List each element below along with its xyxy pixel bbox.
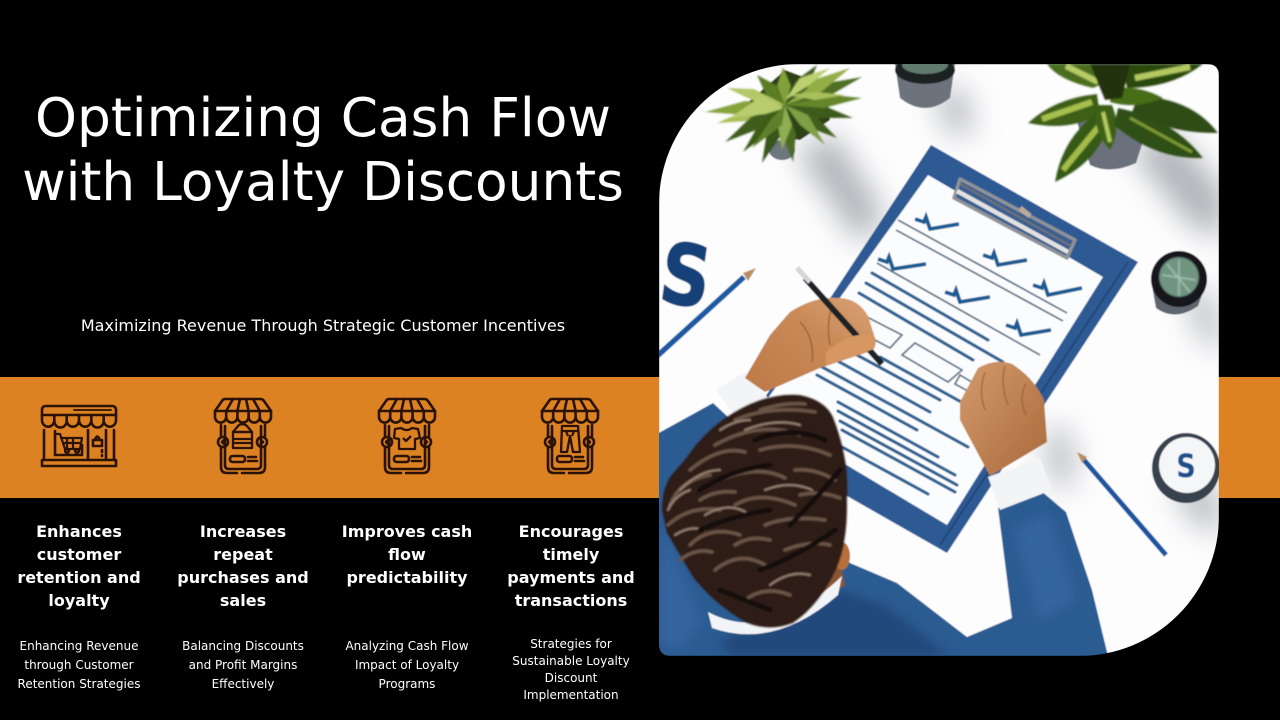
businessman: writing hand and pen	[745, 268, 882, 392]
column: cash flow predictability: Analyzing Cash Flow	[345, 638, 469, 652]
column: retention: through Customer	[24, 658, 134, 672]
title	[22, 86, 624, 213]
right plant	[1028, 64, 1218, 182]
column: repeat purchases: Increases	[200, 522, 286, 541]
coin with S	[1152, 433, 1220, 503]
column: repeat purchases: sales	[220, 591, 266, 610]
icon: storefront with cart	[42, 406, 116, 466]
column: repeat purchases: Effectively	[212, 676, 274, 690]
subtitle: Maximizing Revenue Through Strategic Customer Incentives	[81, 316, 565, 335]
soft shadows	[795, 85, 1225, 530]
check marks	[878, 217, 1082, 335]
photo panel: businessman reviewing a clipboard	[659, 64, 1219, 656]
title: with Loyalty Discounts	[22, 150, 624, 213]
pencil: left	[655, 268, 756, 358]
column: timely payments: timely	[543, 545, 599, 564]
big dollar-style S: S	[654, 225, 717, 328]
businessman: resting hand	[960, 362, 1047, 476]
column: timely payments: Strategies for	[530, 637, 612, 651]
column: retention	[17, 522, 141, 690]
column: timely payments	[507, 522, 635, 702]
left plant	[705, 65, 862, 163]
column: retention: Retention Strategies	[18, 676, 140, 690]
icon: mobile shop with shirt	[379, 399, 435, 473]
column: timely payments: Discount	[545, 671, 597, 685]
column: repeat purchases: repeat	[213, 545, 273, 564]
column: timely payments: transactions	[515, 591, 627, 610]
businessman: neck, collar, ear	[708, 542, 850, 634]
column: cash flow predictability: flow	[388, 545, 426, 564]
businessman: suit	[655, 403, 1108, 656]
cactus pot	[1151, 251, 1207, 315]
coin with S: S	[1176, 448, 1196, 486]
businessman: shirt cuffs	[716, 372, 1052, 510]
column: cash flow predictability: Programs	[379, 676, 435, 690]
pencil: right	[1077, 452, 1166, 555]
icon: mobile shop with bag	[215, 399, 271, 473]
orange band	[0, 377, 1280, 498]
column: timely payments: Encourages	[519, 522, 623, 541]
column: retention: Enhances	[36, 522, 122, 541]
column: cash flow predictability: predictability	[346, 568, 468, 587]
column: timely payments: Implementation	[523, 688, 619, 702]
clipboard	[740, 145, 1138, 553]
column: retention: retention and	[17, 568, 141, 587]
column: timely payments: payments and	[507, 568, 635, 587]
top pot	[894, 64, 956, 108]
column: retention: customer	[37, 545, 121, 564]
column: repeat purchases	[177, 522, 309, 690]
businessman: hair	[662, 395, 847, 628]
column: retention: loyalty	[48, 591, 110, 610]
column: repeat purchases: Balancing Discounts	[182, 638, 304, 652]
metal clip	[954, 179, 1075, 258]
form lines	[862, 220, 1067, 391]
column: retention: Enhancing Revenue	[20, 638, 138, 652]
column: repeat purchases: and Profit Margins	[189, 658, 297, 672]
icon: mobile shop with trousers	[542, 399, 598, 473]
column: repeat purchases: purchases and	[177, 568, 309, 587]
column: cash flow predictability: Improves cash	[342, 522, 472, 541]
column: cash flow predictability: Impact of Loyalty	[355, 658, 459, 672]
column: timely payments: Sustainable Loyalty	[512, 654, 630, 668]
title: Optimizing Cash Flow	[35, 86, 611, 149]
column: cash flow predictability	[342, 522, 472, 690]
